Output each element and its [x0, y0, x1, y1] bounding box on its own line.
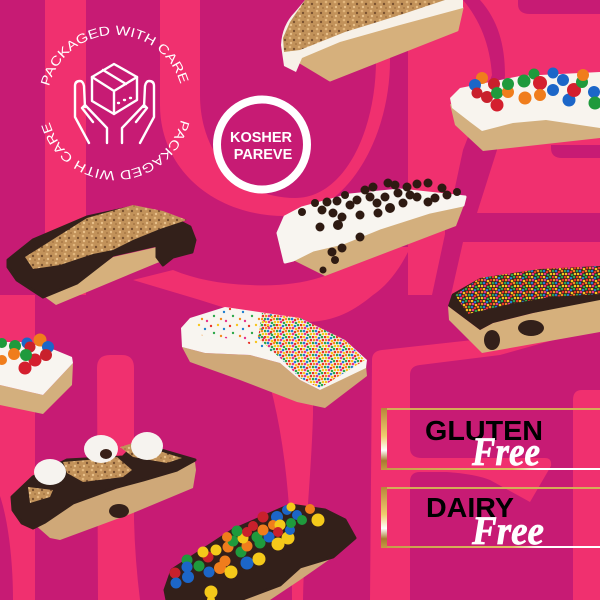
bar: white frosted with chips at left edge	[0, 334, 73, 414]
label: dairy free: DAIRY	[426, 492, 514, 523]
badge: kosher pareve	[217, 100, 307, 190]
badge: kosher pareve: KOSHER	[230, 130, 293, 146]
circular text: top: PACKAGED WITH CARE	[40, 26, 189, 86]
badge: packaged with care	[40, 26, 190, 180]
bar: white frosted with rainbow chips	[450, 68, 600, 151]
bar: chocolate dipped s'mores with marshmallows	[12, 432, 196, 540]
bar: white frosted s'mores crumb top	[281, 0, 463, 80]
label: gluten free: GLUTEN	[425, 415, 543, 446]
bar: white frosted with chocolate chips	[278, 178, 465, 276]
bar: chocolate dipped with rainbow nonpareils	[448, 266, 600, 353]
bar: chocolate dipped with rainbow chips	[165, 502, 355, 600]
badge: kosher pareve: PAREVE	[234, 147, 293, 163]
label: dairy free: Free	[471, 508, 544, 553]
label: gluten free: Free	[471, 429, 540, 474]
bar: chocolate dipped with crumbs	[8, 205, 195, 305]
bar: white frosted with rainbow sprinkles	[181, 307, 367, 408]
label: dairy free	[381, 487, 600, 553]
circular text: bottom: PACKAGED WITH CARE	[41, 120, 190, 180]
icon: box held in two hands	[75, 64, 154, 143]
label: gluten free	[381, 408, 600, 474]
